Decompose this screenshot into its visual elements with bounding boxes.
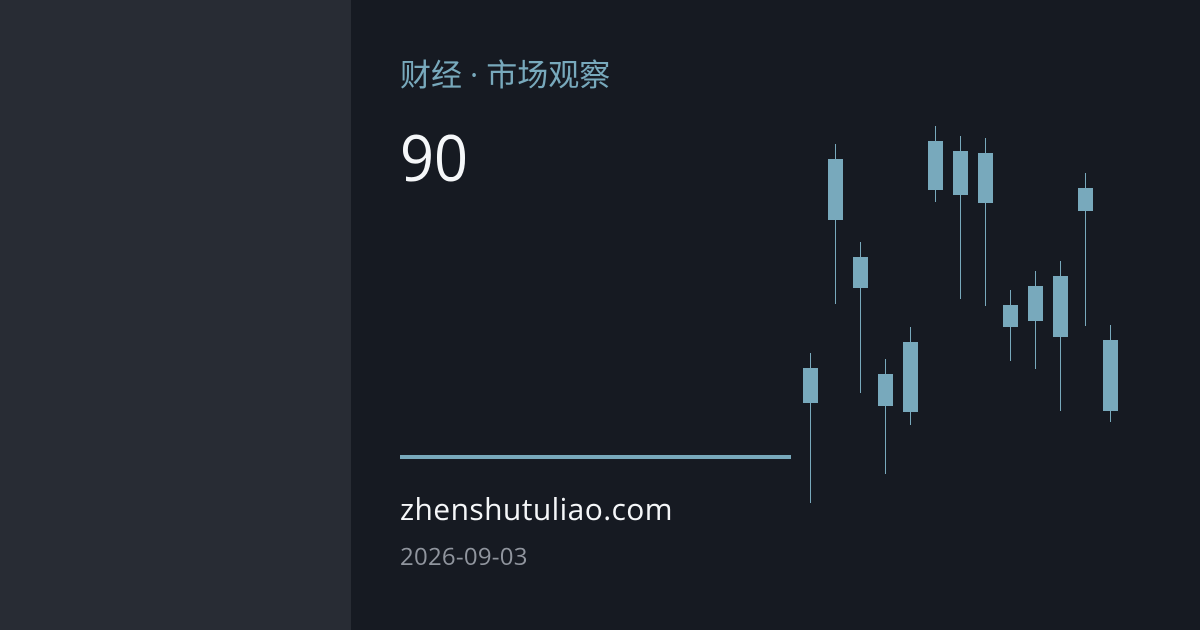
panel: left sidebar xyxy=(0,0,351,630)
accent rule xyxy=(400,455,791,459)
site domain: zhenshutuliao.com xyxy=(400,488,673,529)
eyebrow heading: 财经 · 市场观察 xyxy=(400,54,610,96)
title number: 90 xyxy=(400,113,468,200)
date: 2026-09-03 xyxy=(400,540,528,573)
